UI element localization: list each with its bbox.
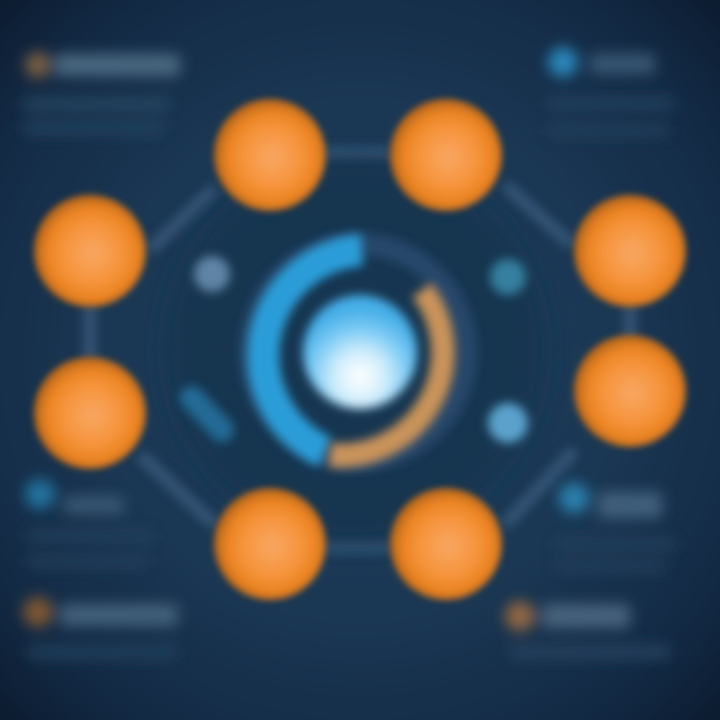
orange orbs	[34, 99, 686, 600]
dark halo behind center ring	[165, 160, 545, 540]
orb: lower right	[574, 335, 686, 447]
node: upper right	[490, 259, 526, 295]
legend block: top right	[548, 47, 673, 136]
orb: bottom right	[390, 488, 502, 600]
legend block: lower right	[555, 483, 675, 571]
orb: upper left	[34, 195, 146, 307]
connector lines between orbs	[90, 153, 630, 547]
orb: lower left	[34, 357, 146, 469]
legend block: bottom right	[505, 601, 670, 658]
orange ring arc	[330, 290, 443, 455]
small satellite nodes	[192, 256, 528, 443]
node: lower left	[192, 398, 222, 430]
legend block: lower left	[25, 479, 153, 567]
node: lower right	[488, 403, 528, 443]
orb: top right	[390, 99, 502, 211]
orb: bottom left	[214, 488, 326, 600]
central ring diagram	[250, 244, 466, 460]
orb: upper right	[574, 195, 686, 307]
orb: top left	[214, 99, 326, 211]
legend block: top left	[24, 52, 180, 134]
legend block: bottom left	[23, 597, 178, 658]
blue ring arc	[263, 250, 362, 452]
ring track	[250, 244, 466, 460]
glowing core	[303, 295, 417, 409]
node: upper left	[194, 256, 230, 292]
